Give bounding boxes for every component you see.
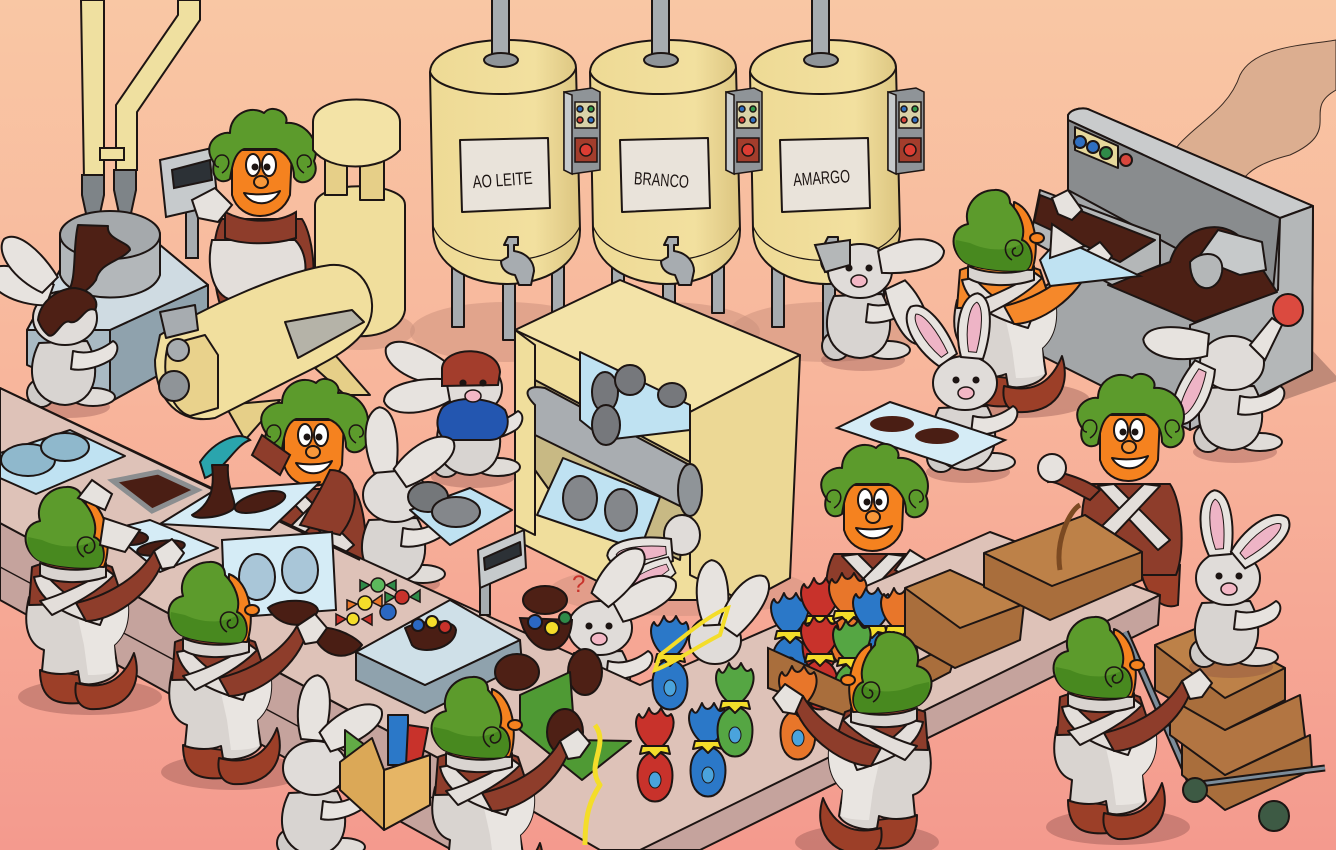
- rabbit with paper rolls: [276, 674, 389, 850]
- mixing vat machine: [27, 211, 208, 402]
- tempering machine: [1030, 108, 1336, 430]
- worker: front right with egg bag: [773, 632, 939, 850]
- rabbit with mould tray: [356, 406, 462, 595]
- worker: right front, tying box: [1038, 374, 1184, 606]
- worker: pushing hand truck: [1046, 617, 1212, 845]
- milk chocolate tank: AO LEITE: [472, 168, 533, 192]
- milk chocolate tank: [410, 0, 600, 362]
- scale display top left: [160, 148, 218, 258]
- rabbit with tray: [837, 292, 1017, 483]
- worker: pouring chocolate: [200, 379, 368, 580]
- rabbit in blue jacket: [379, 334, 522, 488]
- chocolate sink: [113, 472, 197, 511]
- rabbit drinking from tap: [815, 234, 947, 371]
- white chocolate tank: BRANCO: [633, 168, 690, 192]
- scale platform: [356, 530, 526, 713]
- worker: centre, behind boxes: [821, 444, 945, 645]
- yellow horizontal boiler: [155, 265, 372, 440]
- yellow tower machine: [305, 100, 415, 350]
- green wrapping paper and ribbon: [520, 672, 631, 845]
- rabbit inside machine: [606, 515, 700, 599]
- rabbit on boxes: [1189, 489, 1297, 678]
- wrapped eggs: [636, 608, 754, 802]
- smoke from tempering machine: [1165, 40, 1336, 200]
- chocolate mould tray (left): [0, 430, 125, 494]
- production line conveyor tables: [0, 388, 1160, 850]
- candy pile: [336, 578, 420, 625]
- white chocolate tank: [570, 0, 760, 362]
- left pipes: [81, 0, 200, 223]
- chocolate shells on table: [268, 586, 602, 695]
- rabbit tray right of pouring worker: [408, 482, 512, 545]
- control panels: [564, 88, 924, 174]
- worker: front left with tray: [18, 480, 184, 715]
- confused rabbit with question mark: [561, 540, 682, 728]
- tray being poured: [160, 465, 320, 530]
- worker: front centre wrapping egg: [424, 677, 590, 850]
- box of wrapped eggs: [768, 573, 960, 760]
- rabbit behind bags: [689, 559, 777, 664]
- worker: front left second with shell: [161, 562, 327, 790]
- tray with chocolate shells: [108, 520, 218, 572]
- box of paper rolls: [340, 715, 430, 830]
- hand truck with boxes: [1125, 625, 1325, 831]
- dark chocolate tank: [730, 0, 920, 362]
- dark chocolate tank: AMARGO: [792, 166, 851, 190]
- stacked brown boxes: [905, 505, 1142, 668]
- egg mould upright: [222, 532, 336, 618]
- worker: pouring at tempering machine (orange shirt): [946, 190, 1140, 418]
- worker: top-left at scale: [192, 109, 316, 310]
- right side rabbit with button: [1142, 318, 1284, 463]
- confused rabbit with question mark: ?: [572, 571, 585, 598]
- rabbit with chocolate on head: [0, 229, 117, 418]
- center egg moulding machine: [515, 280, 810, 616]
